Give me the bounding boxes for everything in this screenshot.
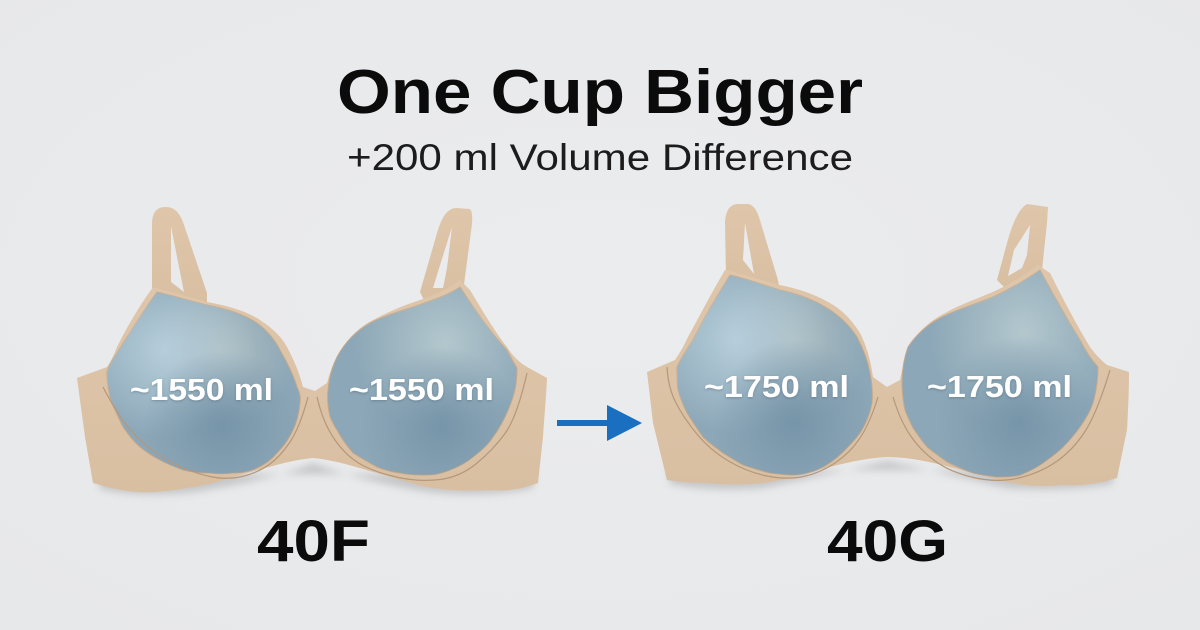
underwire seams	[103, 373, 527, 480]
label: right cup volume: ~1750 ml	[927, 369, 1072, 404]
label: left cup volume: ~1550 ml	[130, 372, 273, 407]
icon: left strap	[152, 207, 207, 305]
size label: 40F: 40F	[257, 509, 370, 574]
icon: right strap	[420, 208, 472, 302]
icon: left strap	[725, 204, 780, 292]
arrow	[557, 405, 642, 441]
icon: right strap	[997, 204, 1048, 288]
band and cup trim	[77, 280, 547, 492]
right cup	[902, 270, 1098, 477]
label: left cup volume: ~1750 ml	[704, 369, 849, 404]
shadow	[98, 463, 535, 494]
bra diagram: 40F	[77, 207, 547, 494]
left cup	[677, 275, 872, 475]
left cup	[107, 292, 300, 474]
label: right cup volume: ~1550 ml	[349, 372, 494, 407]
right cup	[328, 287, 517, 475]
shadow	[668, 461, 1114, 489]
bra diagram: 40G	[647, 204, 1129, 489]
underwire seams	[667, 367, 1110, 480]
band and cup trim	[647, 265, 1129, 486]
size label: 40G: 40G	[827, 509, 948, 574]
subtitle: +200 ml Volume Difference	[347, 137, 853, 178]
title: One Cup Bigger	[337, 58, 863, 127]
